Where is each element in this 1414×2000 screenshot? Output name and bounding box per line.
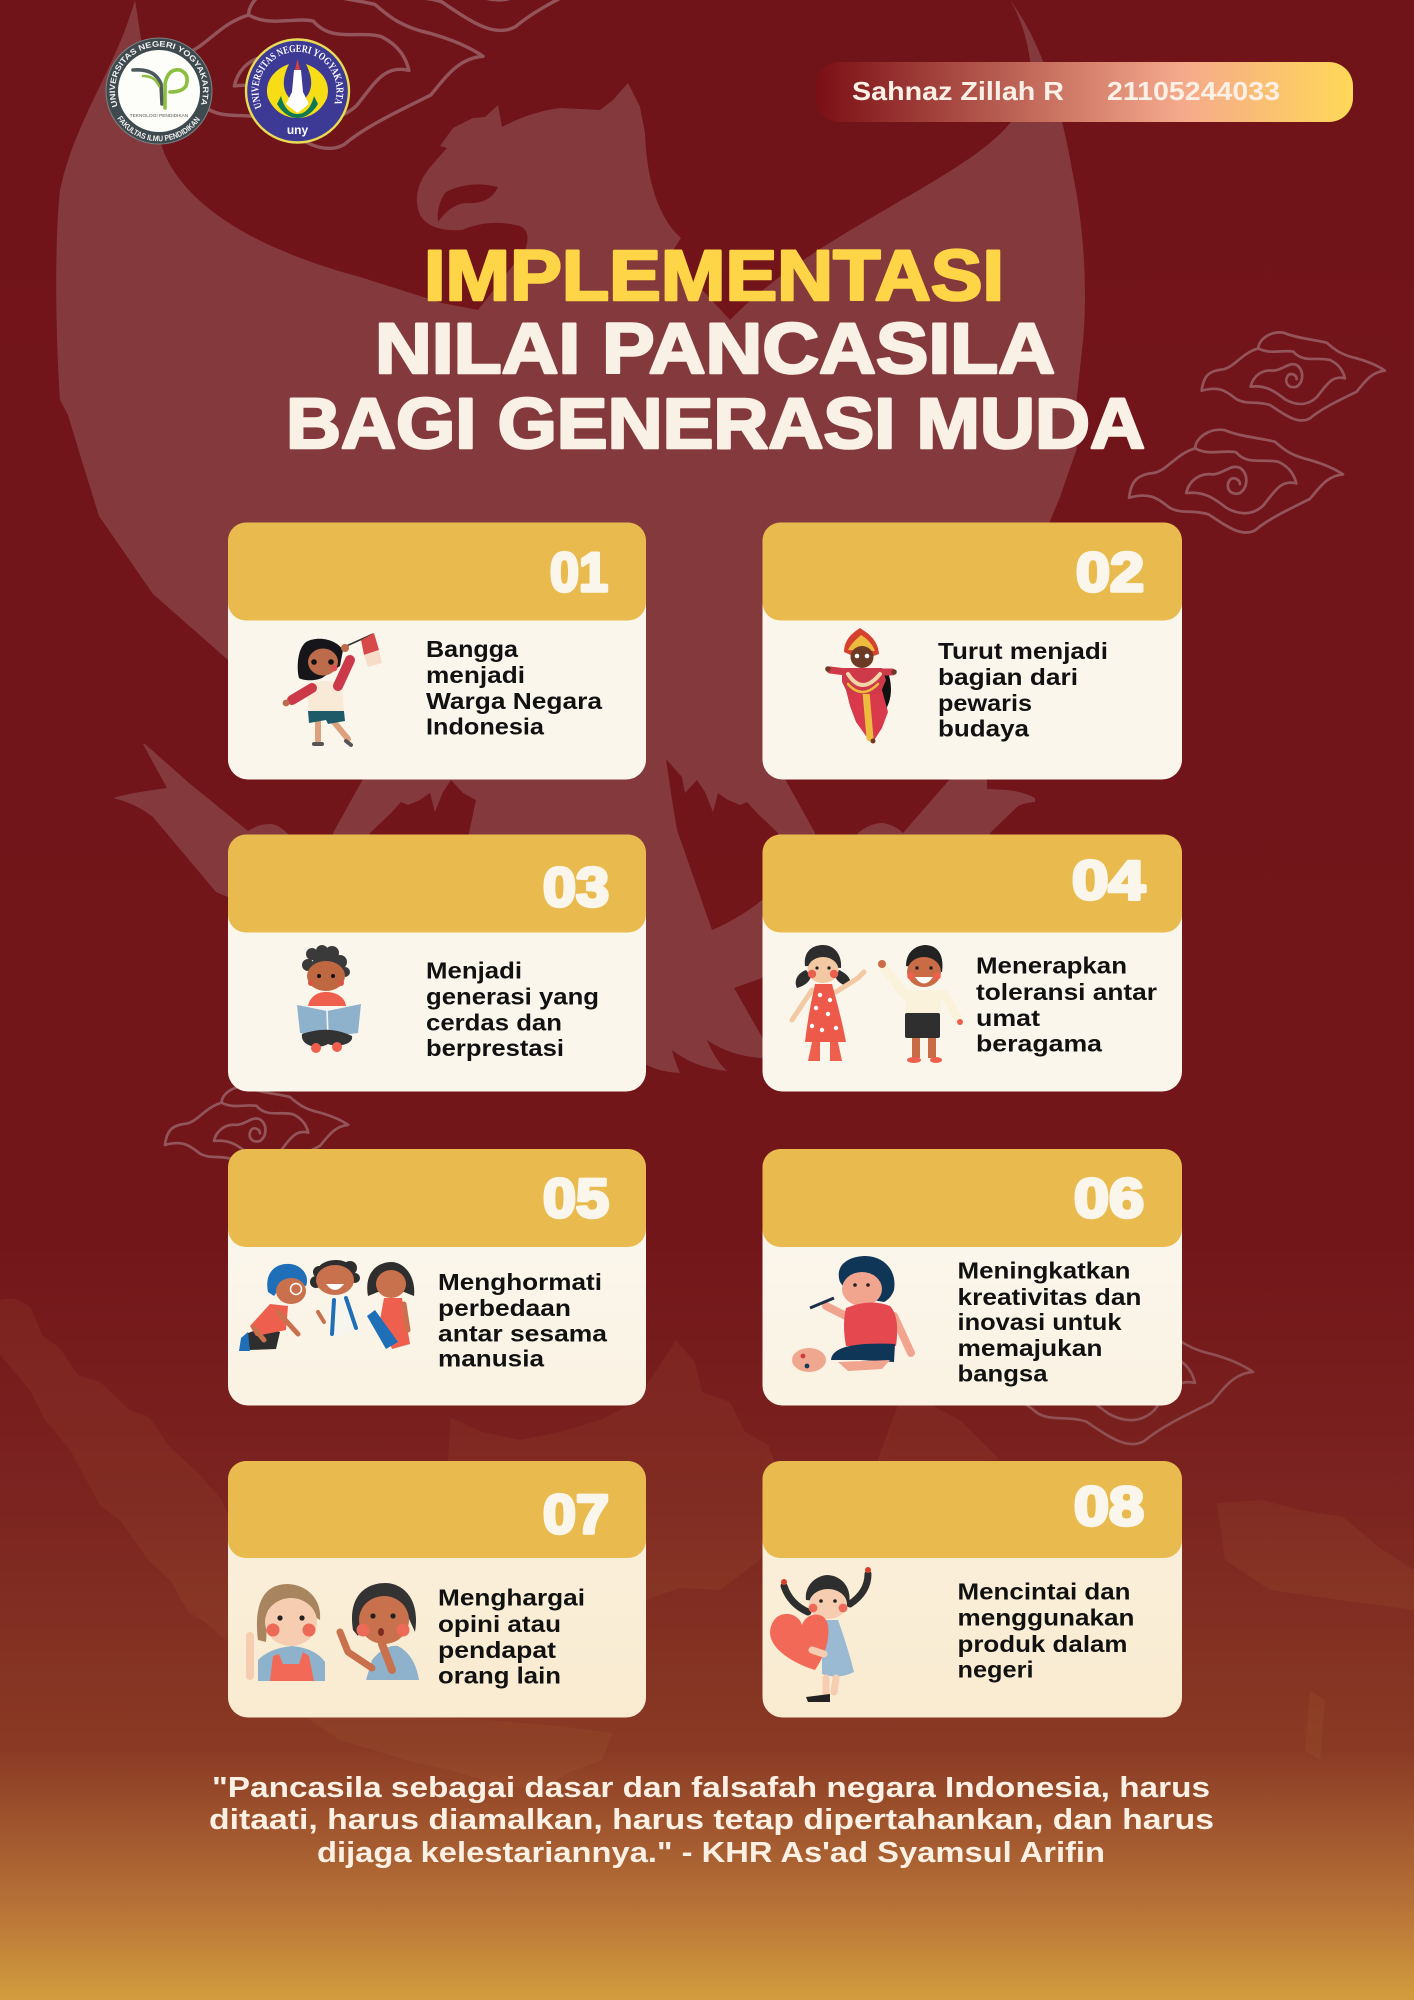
card 01 (228, 522, 646, 780)
batik cloud top centre (315, 0, 655, 31)
card 08: 08 (1074, 1475, 1144, 1537)
card 04: beragama (976, 1030, 1102, 1056)
card 07 (228, 1461, 646, 1718)
card 08: menggunakan (958, 1604, 1134, 1630)
card 02 (762, 522, 1182, 780)
icon: two children talking (250, 1583, 419, 1681)
card 06: inovasi untuk (958, 1309, 1122, 1335)
icon: child reading book (297, 945, 361, 1053)
card 03: berprestasi (426, 1035, 564, 1061)
quote (209, 1772, 1214, 1869)
card 07: Menghargai (438, 1584, 585, 1610)
garuda silhouette (56, 0, 1085, 1073)
batik cloud right lower middle (987, 1316, 1253, 1444)
card 05: perbedaan (438, 1295, 571, 1321)
card 01: Warga Negara (426, 688, 602, 714)
title (286, 237, 1145, 464)
student number: 21105244033 (1107, 76, 1280, 106)
quote: dijaga kelestariannya." - KHR As'ad Syamsul Arifin (317, 1837, 1105, 1869)
card 02: Turut menjadi (938, 638, 1108, 664)
card 01: menjadi (426, 662, 525, 688)
logo: Universitas Negeri Yogyakarta: uny (287, 123, 308, 137)
quote: ditaati, harus diamalkan, harus tetap dipertahankan, dan harus (209, 1804, 1214, 1836)
batik cloud right upper (1202, 332, 1385, 420)
card 03: 03 (543, 856, 609, 918)
card 01: Bangga (426, 636, 518, 662)
card 05: Menghormati (438, 1269, 602, 1295)
card 08: negeri (958, 1656, 1034, 1682)
map of Indonesia silhouette (0, 1298, 1414, 1790)
card 05: 05 (543, 1167, 609, 1229)
card 02: pewaris (938, 690, 1032, 716)
title: IMPLEMENTASI (424, 237, 1004, 316)
card 07: opini atau (438, 1611, 561, 1637)
title: NILAI PANCASILA (375, 310, 1055, 389)
logo: Universitas Negeri Yogyakarta (244, 38, 350, 144)
card 01: 01 (550, 541, 608, 603)
card 06: bangsa (958, 1360, 1048, 1386)
logo: Teknologi Pendidikan (106, 38, 212, 144)
name pill (816, 62, 1353, 122)
card 01: Indonesia (426, 714, 544, 740)
title: BAGI GENERASI MUDA (286, 385, 1145, 464)
card 02: 02 (1076, 541, 1144, 603)
icon: three children together (239, 1260, 414, 1351)
card 03: cerdas dan (426, 1010, 562, 1036)
icon: child hugging heart (770, 1567, 871, 1702)
card 03: Menjadi (426, 958, 522, 984)
card 06: memajukan (958, 1335, 1102, 1361)
name: Sahnaz Zillah R (852, 76, 1064, 106)
logo: Universitas Negeri Yogyakarta: UNIVERSITAS NEGERI YOGYAKARTA (252, 44, 344, 110)
card 06: kreativitas dan (958, 1284, 1142, 1310)
card 05 (228, 1149, 646, 1406)
batik cloud left middle (165, 1087, 348, 1175)
batik cloud right lower (1129, 430, 1343, 533)
card 08: produk dalam (958, 1631, 1128, 1657)
card 02: budaya (938, 716, 1029, 742)
logo: Teknologi Pendidikan: UNIVERSITAS NEGERI YOGYAKARTA (109, 41, 208, 108)
card 06 (762, 1149, 1182, 1406)
logo: Teknologi Pendidikan: TEKNOLOGI PENDIDIKAN (130, 113, 189, 119)
card 04: Menerapkan (976, 952, 1127, 978)
logo: Teknologi Pendidikan: FAKULTAS ILMU PENDIDIKAN (117, 116, 200, 142)
card 08 (762, 1461, 1182, 1718)
icon: traditional dancer (825, 628, 897, 744)
quote: "Pancasila sebagai dasar dan falsafah negara Indonesia, harus (212, 1772, 1210, 1804)
icon: child painting (792, 1256, 911, 1372)
card 08: Mencintai dan (958, 1578, 1130, 1604)
card 04: toleransi antar (976, 979, 1157, 1005)
card 07: pendapat (438, 1637, 556, 1663)
card 03: generasi yang (426, 984, 599, 1010)
card 05: manusia (438, 1346, 544, 1372)
card 04 (762, 834, 1182, 1092)
card 04: umat (976, 1005, 1040, 1031)
icon: child with flag (283, 633, 382, 745)
card 06: 06 (1074, 1167, 1144, 1229)
icon: two children waving (792, 945, 963, 1063)
card 03 (228, 834, 646, 1092)
card 07: 07 (543, 1483, 609, 1545)
card 05: antar sesama (438, 1320, 607, 1346)
batik cloud top left (144, 0, 483, 149)
card 02: bagian dari (938, 664, 1078, 690)
card 07: orang lain (438, 1662, 561, 1688)
card 06: Meningkatkan (958, 1258, 1130, 1284)
card 04: 04 (1072, 849, 1145, 911)
